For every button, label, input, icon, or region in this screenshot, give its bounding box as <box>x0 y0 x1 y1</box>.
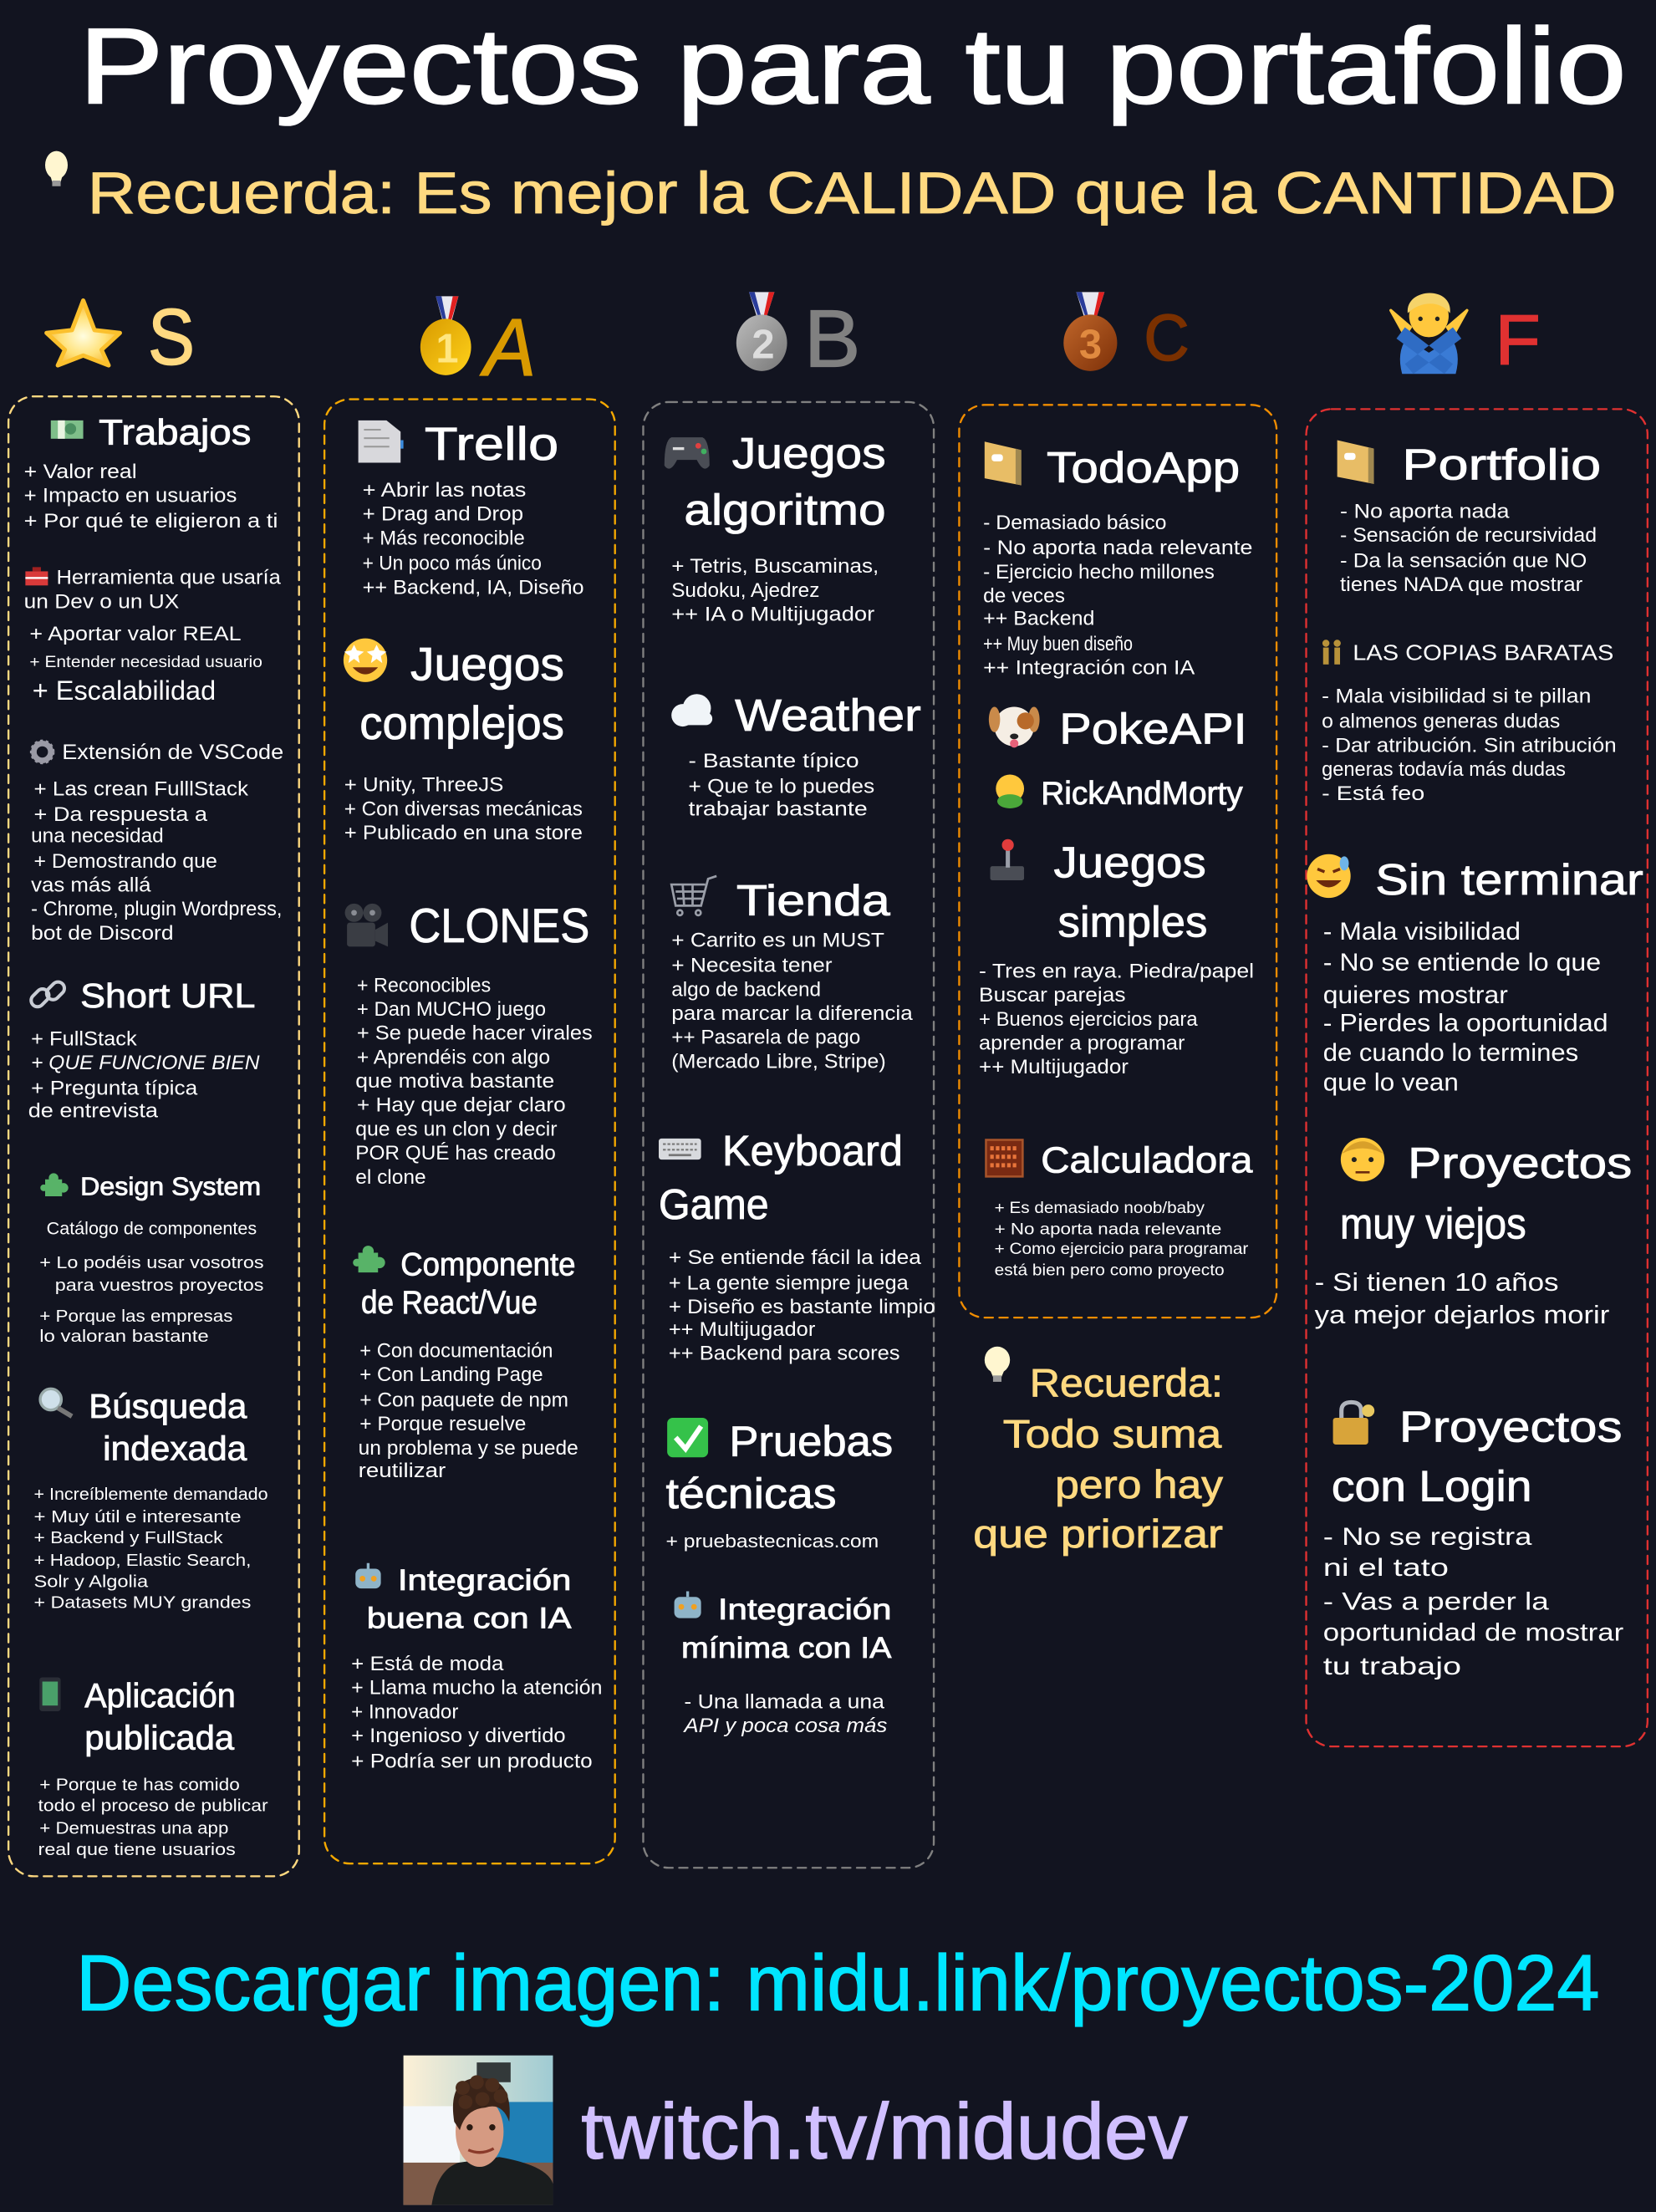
list: + La gente siempre juega <box>669 1272 910 1294</box>
list: + Como ejercicio para programar <box>995 1240 1249 1258</box>
list: + Escalabilidad <box>33 675 216 706</box>
subtitle callout <box>45 151 1617 227</box>
list: aprender a programar <box>979 1032 1185 1055</box>
icon: sweat smile face <box>1307 854 1351 898</box>
list <box>344 775 583 844</box>
list <box>682 1692 888 1737</box>
list <box>688 751 874 820</box>
heading: Proyectos <box>1408 1139 1632 1188</box>
list: Sudoku, Ajedrez <box>671 580 819 602</box>
list: - No se registra <box>1323 1523 1532 1551</box>
icon: toolbox <box>25 567 48 585</box>
heading: RickAndMorty <box>1041 776 1243 812</box>
heading: Juegos <box>732 430 886 478</box>
icon: robot <box>675 1592 701 1618</box>
list: + Aportar valor REAL <box>29 623 242 645</box>
icon: light bulb <box>985 1347 1010 1382</box>
icon: bronze medal <box>1063 292 1117 371</box>
panel: B tier <box>643 402 935 1868</box>
section: Juegos complejos <box>344 638 583 844</box>
heading: muy viejos <box>1340 1200 1526 1249</box>
icon: silver medal <box>736 292 787 371</box>
list <box>351 1654 603 1772</box>
callout: Recuerda <box>973 1347 1223 1557</box>
heading <box>665 1417 893 1517</box>
list: - Bastante típico <box>688 751 859 772</box>
list: ++ Multijugador <box>669 1319 815 1341</box>
list: + Valor real <box>24 461 137 483</box>
list: + Aprendéis con algo <box>357 1047 550 1068</box>
list: + Abrir las notas <box>363 479 526 502</box>
section: Extensión de VSCode <box>31 741 283 945</box>
list: generas todavía más dudas <box>1322 759 1566 781</box>
heading: Portfolio <box>1402 441 1601 490</box>
list: + Con Landing Page <box>359 1364 543 1386</box>
list <box>671 930 914 1073</box>
icon: robot <box>355 1563 381 1588</box>
list: - Da la sensación que NO <box>1340 550 1587 572</box>
icon: puzzle <box>353 1246 385 1272</box>
icon: shopping cart <box>671 876 716 915</box>
heading: de React/Vue <box>361 1285 538 1321</box>
heading: Juegos <box>410 638 564 690</box>
section: Weather <box>671 691 921 820</box>
list: + Llama mucho la atención <box>351 1678 603 1700</box>
list <box>1323 1523 1623 1680</box>
section: Portfolio <box>1338 440 1601 596</box>
list: + Unity, ThreeJS <box>344 775 503 797</box>
heading: Componente <box>400 1246 575 1283</box>
list: + Publicado en una store <box>344 823 583 844</box>
list: un problema y se puede <box>359 1438 578 1460</box>
list: + Un poco más único <box>363 553 542 575</box>
list <box>39 1254 264 1346</box>
list: + Da respuesta a <box>33 804 208 826</box>
list: - Está feo <box>1322 783 1424 805</box>
list: - No se entiende lo que <box>1323 949 1601 976</box>
list: + Más reconocible <box>363 527 525 549</box>
heading: Integración <box>398 1563 571 1597</box>
section: Short URL <box>28 976 260 1123</box>
icon: abacus <box>986 1140 1022 1176</box>
list <box>979 961 1254 1078</box>
heading: Herramienta que usaría <box>56 567 281 589</box>
list: + Pregunta típica <box>31 1078 198 1100</box>
list: - Una llamada a una <box>684 1692 885 1714</box>
list: + Podría ser un producto <box>351 1751 593 1772</box>
list: API y poca cosa más <box>682 1715 888 1737</box>
list: POR QUÉ has creado <box>355 1142 556 1165</box>
panel: S tier <box>8 396 299 1876</box>
section: Proyectos muy viejos <box>1315 1138 1632 1329</box>
heading: publicada <box>84 1718 235 1757</box>
list: tu trabajo <box>1323 1653 1461 1680</box>
panel border <box>324 400 615 1863</box>
list <box>995 1199 1249 1280</box>
list: + Porque te has comido <box>39 1776 240 1794</box>
list: que es un clon y decir <box>355 1119 558 1140</box>
callout text: que priorizar <box>973 1512 1223 1557</box>
list: + Carrito es un MUST <box>671 930 884 951</box>
section: Pruebas técnicas <box>665 1417 893 1552</box>
list: ++ Multijugador <box>979 1057 1129 1078</box>
heading: Trello <box>425 418 558 470</box>
list: ya mejor dejarlos morir <box>1315 1302 1609 1329</box>
list: + Es demasiado noob/baby <box>995 1199 1205 1217</box>
list: + Se puede hacer virales <box>357 1023 593 1045</box>
list: + Demostrando que <box>33 851 217 873</box>
list <box>29 623 262 706</box>
section: CLONES <box>345 900 593 1189</box>
icon: link <box>28 979 67 1009</box>
heading <box>359 638 564 749</box>
tier header: B <box>736 292 860 385</box>
list: - Tres en raya. Piedra/papel <box>979 961 1254 982</box>
list: + Porque las empresas <box>39 1307 232 1326</box>
icon: cloud <box>671 694 712 726</box>
text block: Catálogo de componentes <box>47 1220 257 1239</box>
list: ++ Muy buen diseño <box>983 634 1133 655</box>
icon: gold medal: 1 <box>436 327 459 372</box>
list <box>669 1247 935 1365</box>
icon: twins <box>1322 640 1341 665</box>
list <box>671 556 879 626</box>
list <box>1340 501 1597 596</box>
download link: Descargar imagen: midu.link/proyectos-2024 <box>76 1939 1600 2028</box>
twitch link: twitch.tv/midudev <box>581 2087 1188 2176</box>
heading: Extensión de VSCode <box>62 741 283 764</box>
icon: old man face <box>1341 1138 1384 1181</box>
heading: indexada <box>103 1430 247 1468</box>
icon: silver medal: 2 <box>752 323 775 368</box>
heading <box>684 430 886 535</box>
tier letter C: C <box>1144 302 1189 374</box>
list: ++ Backend, IA, Diseño <box>363 576 584 599</box>
list: una necesidad <box>31 825 164 847</box>
list: + Muy útil e interesante <box>33 1508 242 1526</box>
heading: buena con IA <box>367 1601 572 1634</box>
tier header: S <box>47 293 195 381</box>
heading: Aplicación <box>84 1676 236 1715</box>
heading <box>1332 1404 1623 1511</box>
heading: técnicas <box>665 1470 837 1517</box>
section: Componente de React/Vue <box>353 1246 578 1482</box>
list: + FullStack <box>31 1028 137 1050</box>
section: Design System <box>39 1173 264 1346</box>
icon: dog face <box>989 706 1040 747</box>
heading: Design System <box>80 1173 261 1200</box>
section: Juegos algoritmo <box>665 430 886 626</box>
tier letter S: S <box>148 293 195 381</box>
list: está bien pero como proyecto <box>995 1261 1225 1280</box>
tier header: F <box>1391 293 1541 379</box>
list: quieres mostrar <box>1323 981 1508 1009</box>
section: Juegos simples <box>979 839 1254 1078</box>
list: + Dan MUCHO juego <box>357 999 546 1021</box>
list: - Mala visibilidad si te pillan <box>1322 686 1591 707</box>
list: + Datasets MUY grandes <box>33 1594 251 1613</box>
list: bot de Discord <box>31 923 174 945</box>
heading: Keyboard <box>722 1127 903 1175</box>
heading: simples <box>1058 898 1207 947</box>
heading: Proyectos <box>1399 1404 1623 1452</box>
list <box>363 479 584 599</box>
icon: joystick <box>991 839 1024 880</box>
callout text <box>973 1362 1223 1557</box>
list: - No aporta nada <box>1340 501 1511 522</box>
list: - Si tienen 10 años <box>1315 1269 1559 1297</box>
section: Herramienta <box>24 567 281 706</box>
list: real que tiene usuarios <box>38 1841 236 1859</box>
list: + Buenos ejercicios para <box>979 1009 1198 1031</box>
panel: A tier <box>324 400 615 1863</box>
section: Tienda <box>671 876 914 1073</box>
icon: notebook <box>1338 440 1374 484</box>
heading: PokeAPI <box>1059 705 1247 753</box>
list: + Impacto en usuarios <box>24 486 237 507</box>
tier header: C <box>1063 292 1189 374</box>
list: + Por qué te eligieron a ti <box>24 511 278 533</box>
icon: document <box>359 420 404 463</box>
heading: Short URL <box>80 976 255 1015</box>
list: trabajar bastante <box>688 798 868 820</box>
heading <box>1053 839 1207 947</box>
list: - Dar atribución. Sin atribución <box>1322 735 1617 757</box>
heading: Integración <box>718 1593 891 1626</box>
list <box>355 975 593 1189</box>
section: PokeAPI <box>989 705 1247 753</box>
icon: bronze medal: 3 <box>1079 323 1102 368</box>
list: + Que te lo puedes <box>688 776 874 798</box>
list: + Hadoop, Elastic Search, <box>33 1552 251 1570</box>
list: + Lo podéis usar vosotros <box>39 1254 264 1272</box>
list: Solr y Algolia <box>33 1572 149 1591</box>
section: Sin terminar <box>1307 854 1643 1096</box>
list: + Drag and Drop <box>363 503 523 526</box>
heading: Pruebas <box>729 1417 893 1465</box>
heading: Calculadora <box>1041 1139 1253 1180</box>
heading: Game <box>659 1180 769 1228</box>
author photo <box>404 2056 553 2205</box>
heading: Weather <box>735 691 921 741</box>
heading <box>89 1387 247 1468</box>
heading <box>84 1676 236 1757</box>
tier letter F: F <box>1495 300 1541 379</box>
list: reutilizar <box>359 1460 446 1482</box>
list: + Ingenioso y divertido <box>351 1725 566 1747</box>
callout text: Recuerda: <box>1030 1362 1223 1406</box>
icon: movie camera <box>345 904 388 946</box>
heading: mínima con IA <box>681 1631 892 1664</box>
heading <box>681 1593 892 1664</box>
list <box>359 1340 578 1482</box>
heading: Búsqueda <box>89 1387 247 1425</box>
list: + No aporta nada relevante <box>995 1221 1221 1239</box>
list: - No aporta nada relevante <box>983 538 1252 559</box>
heading: algoritmo <box>684 487 886 535</box>
heading: TodoApp <box>1047 444 1240 492</box>
section: Keyboard Game <box>659 1127 935 1365</box>
icon: keyboard <box>659 1139 701 1160</box>
list: + Entender necesidad usuario <box>29 653 262 671</box>
list: + QUE FUNCIONE BIEN <box>31 1052 260 1074</box>
heading <box>367 1563 572 1634</box>
icon: star struck face <box>344 639 387 682</box>
list: ++ Integración con IA <box>983 658 1195 680</box>
icon: check mark <box>667 1418 708 1457</box>
list: que lo vean <box>1323 1068 1459 1096</box>
panel border <box>8 396 299 1876</box>
list: de cuando lo termines <box>1323 1039 1578 1067</box>
list: ++ Backend <box>983 609 1094 630</box>
list: todo el proceso de publicar <box>38 1797 268 1816</box>
list <box>1323 918 1608 1096</box>
list <box>28 1028 260 1123</box>
icon: star <box>47 300 120 365</box>
heading line 2: un Dev o un UX <box>24 590 179 613</box>
icon: gamepad <box>665 437 710 469</box>
list: + Con diversas mecánicas <box>344 798 583 820</box>
list <box>33 1486 268 1613</box>
heading: Sin terminar <box>1375 856 1643 905</box>
heading: Juegos <box>1053 839 1206 888</box>
icon: puzzle <box>40 1173 69 1196</box>
list: + Diseño es bastante limpio <box>669 1297 935 1318</box>
list: vas más allá <box>31 874 151 897</box>
list: de veces <box>983 586 1065 608</box>
list: + Porque resuelve <box>359 1414 526 1435</box>
icon: phone <box>39 1677 61 1711</box>
section: Las copias baratas <box>1322 640 1617 805</box>
list: + Reconocibles <box>357 975 491 996</box>
heading: Trabajos <box>99 413 251 452</box>
list: algo de backend <box>671 979 821 1001</box>
list: - Mala visibilidad <box>1323 918 1521 945</box>
heading: LAS COPIAS BARATAS <box>1353 640 1613 665</box>
list: - Sensación de recursividad <box>1340 525 1597 547</box>
list: + Innovador <box>351 1701 459 1723</box>
icon: man crossing arms <box>1391 293 1467 374</box>
list: - Ejercicio hecho millones <box>983 562 1215 584</box>
list: oportunidad de mostrar <box>1323 1619 1623 1647</box>
list: ++ Backend para scores <box>669 1343 900 1365</box>
list: + Backend y FullStack <box>33 1529 224 1547</box>
section: Integración mínima con IA <box>675 1592 892 1737</box>
icon: magnifier <box>40 1389 72 1416</box>
tier letter A: A <box>480 301 536 393</box>
list <box>983 512 1252 680</box>
list: lo valoran bastante <box>39 1328 209 1346</box>
icon: notebook <box>985 441 1022 485</box>
list: para marcar la diferencia <box>671 1003 914 1025</box>
list: ++ IA o Multijugador <box>671 604 874 626</box>
section: Trabajos <box>24 413 278 533</box>
list <box>38 1776 268 1859</box>
tier letter B: B <box>804 293 860 385</box>
list: ++ Pasarela de pago <box>671 1027 860 1049</box>
panel border <box>643 402 934 1868</box>
panel border <box>1307 409 1648 1746</box>
title: Proyectos para tu portafolio <box>79 7 1627 126</box>
list: (Mercado Libre, Stripe) <box>671 1051 886 1073</box>
list: + Está de moda <box>351 1654 504 1675</box>
section: Proyectos con Login <box>1323 1402 1623 1680</box>
section: RickAndMorty <box>996 774 1243 812</box>
heading: CLONES <box>409 900 589 953</box>
list: - Demasiado básico <box>983 512 1166 534</box>
icon: money <box>51 420 84 439</box>
list: - Pierdes la oportunidad <box>1323 1010 1608 1037</box>
list: tienes NADA que mostrar <box>1340 574 1582 596</box>
callout text: pero hay <box>1055 1463 1223 1507</box>
heading <box>361 1246 575 1321</box>
heading <box>659 1127 903 1228</box>
subtitle text: Recuerda: Es mejor la CALIDAD que la CANTIDAD <box>88 161 1617 227</box>
list: + Necesita tener <box>671 956 833 977</box>
list <box>31 779 282 945</box>
section: Calculadora <box>986 1139 1253 1280</box>
list: + Demuestras una app <box>39 1820 228 1838</box>
heading <box>1340 1139 1632 1249</box>
list: Buscar parejas <box>979 985 1126 1007</box>
list: ni el tato <box>1323 1554 1449 1582</box>
list: + Hay que dejar claro <box>357 1095 566 1117</box>
list: - Vas a perder la <box>1323 1588 1549 1615</box>
list: que motiva bastante <box>355 1071 554 1093</box>
panel: F tier <box>1307 409 1648 1746</box>
text block: + pruebastecnicas.com <box>665 1531 879 1552</box>
list: + Con paquete de npm <box>359 1389 568 1411</box>
icon: vomiting face <box>996 774 1024 808</box>
list: de entrevista <box>28 1100 159 1123</box>
list: o almenos generas dudas <box>1322 711 1560 733</box>
list <box>24 461 278 533</box>
icon: padlock with key <box>1333 1402 1374 1445</box>
icon: light bulb <box>45 151 68 186</box>
heading: con Login <box>1332 1462 1532 1511</box>
list: + Las crean FulllStack <box>33 779 248 801</box>
callout text: Todo suma <box>1003 1412 1222 1456</box>
list <box>1322 686 1617 805</box>
icon: gear <box>31 741 54 763</box>
list: + Se entiende fácil la idea <box>669 1247 922 1269</box>
panel: C tier <box>959 405 1276 1318</box>
list: - Chrome, plugin Wordpress, <box>31 899 282 920</box>
tier header: A <box>420 296 536 393</box>
list <box>1315 1269 1609 1329</box>
section: Trello <box>359 418 584 599</box>
list: el clone <box>355 1167 426 1189</box>
section: Aplicación publicada <box>38 1676 268 1859</box>
panel border <box>959 405 1276 1318</box>
section: Búsqueda indexada <box>33 1387 268 1613</box>
list: para vuestros proyectos <box>55 1277 264 1295</box>
list: + Con documentación <box>359 1340 553 1362</box>
section: Integración buena con IA <box>351 1563 603 1772</box>
list: + Tetris, Buscaminas, <box>671 556 879 578</box>
heading: complejos <box>359 697 564 749</box>
list: + Increíblemente demandado <box>33 1486 268 1504</box>
heading: Tienda <box>736 877 891 925</box>
section: TodoApp <box>983 441 1252 680</box>
